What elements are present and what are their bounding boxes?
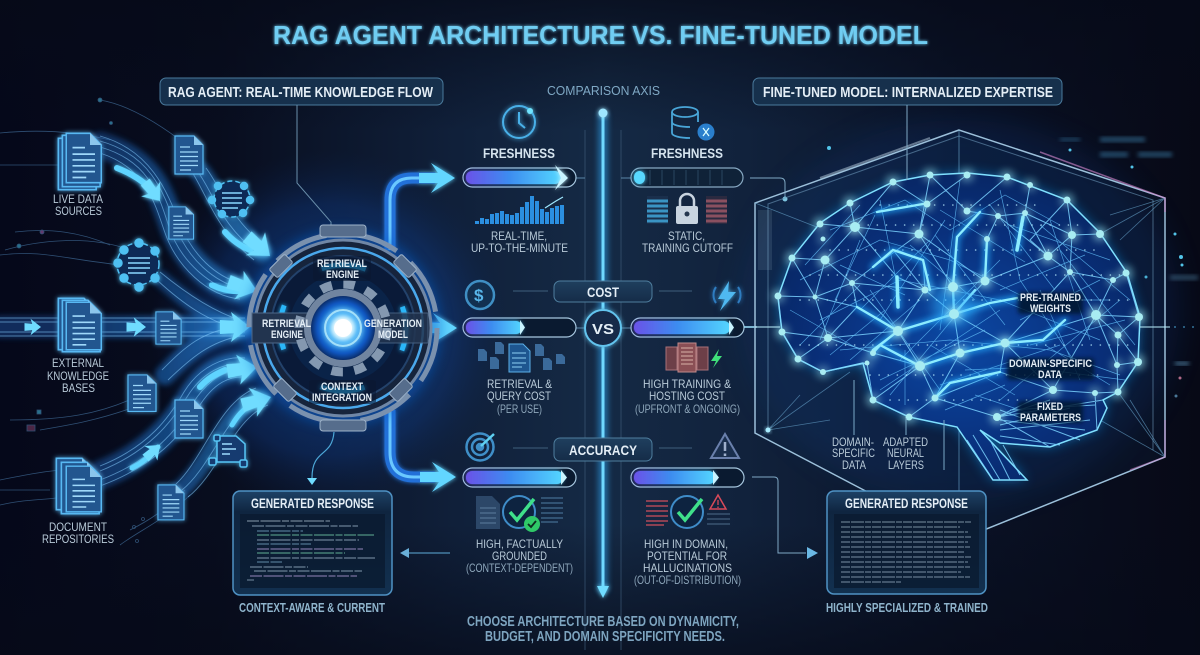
brain label: domain-specific data (below): DOMAIN- bbox=[832, 435, 874, 449]
gear label: context integration bbox=[309, 380, 376, 404]
arrow: to accuracy bbox=[390, 410, 456, 492]
fine-tuned: cost: HOSTING COST bbox=[649, 389, 726, 403]
meter: high with limit bbox=[631, 468, 744, 487]
brain label: domain-specific data (below): DATA bbox=[842, 458, 866, 472]
panel: fine-tuned model internalized expertise bbox=[744, 78, 1200, 615]
gear label: context integration: INTEGRATION bbox=[312, 392, 372, 404]
meter: per use, medium bbox=[463, 318, 576, 337]
fine-tuned: freshness bbox=[631, 107, 743, 255]
section heading: RAG agent bbox=[160, 78, 443, 105]
pill: accuracy: ACCURACY bbox=[569, 442, 638, 458]
brain label: adapted neural layers: LAYERS bbox=[888, 458, 924, 472]
source: live data sources bbox=[53, 133, 103, 218]
RAG: freshness: UP-TO-THE-MINUTE bbox=[471, 241, 568, 255]
fine-tuned: accuracy: HALLUCINATIONS bbox=[643, 561, 732, 575]
pill: cost bbox=[554, 281, 652, 302]
gear label: retrieval engine left: RETRIEVAL bbox=[262, 318, 311, 330]
gear label: context integration: CONTEXT bbox=[321, 381, 363, 393]
source: document repositories: DOCUMENT bbox=[49, 520, 108, 534]
leader lines: external labels to brain bbox=[854, 380, 944, 470]
central axis arrow bbox=[597, 108, 609, 598]
brain label: domain-specific data (below): SPECIFIC bbox=[832, 446, 875, 460]
card: RAG generated response: GENERATED RESPONSE bbox=[251, 495, 374, 511]
neural network brain bbox=[755, 172, 1170, 480]
fine-tuned: cost: (UPFRONT & ONGOING) bbox=[635, 402, 740, 416]
icon: document stack bbox=[56, 458, 101, 514]
gear label: retrieval engine top: RETRIEVAL bbox=[317, 258, 367, 270]
card: fine-tuned generated response: HIGHLY SPECIALIZED & TRAINED bbox=[826, 600, 988, 615]
brain label: domain-specific data: DATA bbox=[1038, 369, 1062, 381]
icon: database with badge bbox=[672, 107, 714, 140]
arrow: to freshness bbox=[390, 163, 455, 250]
source: external knowledge bases: BASES bbox=[62, 381, 95, 395]
arrow: accuracy back to response bbox=[400, 548, 450, 558]
icon: clock bbox=[503, 106, 535, 138]
brain label: adapted neural layers: ADAPTED bbox=[883, 435, 928, 449]
source: external knowledge bases bbox=[47, 298, 109, 395]
fine-tuned: freshness: TRAINING CUTOFF bbox=[642, 241, 733, 255]
glass prism enclosure bbox=[755, 130, 1165, 540]
fine-tuned: accuracy: POTENTIAL FOR bbox=[647, 549, 727, 563]
fine-tuned: cost bbox=[631, 281, 744, 416]
gear label: generation model bbox=[364, 318, 422, 341]
source: document repositories bbox=[42, 458, 114, 546]
brain label: pre-trained weights: PRE-TRAINED bbox=[1020, 292, 1081, 304]
RAG: accuracy: HIGH, FACTUALLY bbox=[476, 537, 563, 551]
gear label: retrieval engine left bbox=[262, 318, 311, 341]
connector lines from meters to the brain bbox=[744, 178, 818, 559]
meter: high cost bbox=[631, 318, 744, 337]
section heading: fine-tuned model bbox=[753, 78, 1062, 105]
closing recommendation: CHOOSE ARCHITECTURE BASED ON DYNAMICITY, bbox=[467, 614, 739, 630]
arrow: to cost bbox=[415, 313, 457, 343]
fine-tuned: accuracy bbox=[631, 434, 744, 587]
RAG: accuracy: (CONTEXT-DEPENDENT) bbox=[466, 561, 573, 575]
icon: document stack bbox=[58, 298, 101, 352]
icon: network node cluster (middle) bbox=[114, 239, 159, 291]
leader line: heading to gear bbox=[297, 105, 331, 226]
RAG: accuracy bbox=[463, 434, 576, 575]
icon: energy bolt bbox=[713, 281, 741, 311]
RAG: freshness: FRESHNESS bbox=[483, 145, 555, 161]
icon: warning triangle bbox=[711, 434, 739, 458]
section heading: RAG agent: RAG AGENT: REAL-TIME KNOWLEDGE FLOW bbox=[168, 84, 434, 101]
icon: network node cluster (upper) bbox=[208, 181, 254, 218]
icon: query documents bbox=[478, 342, 565, 372]
leader: heading to brain bbox=[906, 105, 908, 180]
decorative data specks bbox=[827, 137, 1200, 398]
source: document repositories: REPOSITORIES bbox=[42, 532, 114, 546]
panel: comparison axis bbox=[463, 83, 744, 650]
RAG: cost: RETRIEVAL & bbox=[487, 377, 552, 391]
fine-tuned: accuracy: HIGH IN DOMAIN, bbox=[644, 537, 728, 551]
fine-tuned: freshness: FRESHNESS bbox=[651, 145, 723, 161]
fine-tuned: freshness: STATIC, bbox=[668, 229, 705, 243]
brain label: adapted neural layers: NEURAL bbox=[887, 446, 924, 460]
card: fine-tuned generated response bbox=[826, 491, 988, 615]
brain label: domain-specific data (below) bbox=[832, 435, 875, 472]
icon: document stack bbox=[58, 133, 101, 190]
brain label: domain-specific data: DOMAIN-SPECIFIC bbox=[1009, 358, 1092, 370]
fine-tuned: cost: HIGH TRAINING & bbox=[643, 377, 731, 391]
axis label: COMPARISON AXIS bbox=[547, 83, 660, 98]
panel: RAG agent real-time knowledge flow bbox=[0, 78, 457, 615]
meter: high accuracy bbox=[463, 468, 576, 487]
card: RAG generated response bbox=[233, 491, 392, 615]
RAG: cost bbox=[463, 281, 576, 416]
RAG: accuracy: GROUNDED bbox=[492, 549, 547, 563]
gear label: retrieval engine top bbox=[313, 256, 371, 281]
arrow: gear to generated response bbox=[307, 432, 334, 485]
gear label: generation model: MODEL bbox=[378, 329, 408, 341]
brain label: fixed parameters: PARAMETERS bbox=[1020, 412, 1081, 424]
badge: vs bbox=[585, 310, 621, 346]
brain label: pre-trained weights bbox=[1018, 292, 1083, 315]
closing recommendation: BUDGET, AND DOMAIN SPECIFICITY NEEDS. bbox=[485, 629, 725, 645]
fine-tuned: accuracy: (OUT-OF-DISTRIBUTION) bbox=[634, 573, 741, 587]
card: RAG generated response: CONTEXT-AWARE & CURRENT bbox=[239, 600, 385, 615]
brain label: pre-trained weights: WEIGHTS bbox=[1030, 303, 1071, 315]
icon: certified document cluster bbox=[209, 435, 247, 467]
faint data streaks bbox=[0, 98, 190, 545]
title: RAG AGENT ARCHITECTURE VS. FINE-TUNED MODEL bbox=[273, 20, 928, 50]
icon: grounded check bbox=[476, 496, 563, 532]
pill: cost: COST bbox=[587, 284, 619, 300]
pill: accuracy bbox=[554, 438, 652, 461]
mini bar chart bbox=[475, 196, 564, 224]
gear label: retrieval engine left: ENGINE bbox=[271, 329, 303, 341]
brain label: fixed parameters: FIXED bbox=[1037, 401, 1063, 413]
meter: static, low bbox=[631, 168, 743, 187]
icon: locked training data bbox=[647, 194, 727, 224]
RAG: cost: (PER USE) bbox=[497, 402, 542, 416]
icon: target bbox=[466, 434, 494, 460]
brain label: fixed parameters bbox=[1018, 401, 1083, 424]
source: external knowledge bases: EXTERNAL bbox=[52, 356, 104, 370]
gear label: retrieval engine top: ENGINE bbox=[326, 269, 359, 281]
closing recommendation bbox=[467, 614, 739, 645]
data flow ribbons into the gear bbox=[0, 136, 280, 497]
icons: documents in transit bbox=[128, 136, 203, 520]
source: external knowledge bases: KNOWLEDGE bbox=[47, 369, 109, 383]
source: live data sources: SOURCES bbox=[55, 204, 102, 218]
RAG: freshness bbox=[463, 106, 576, 255]
RAG: freshness: REAL-TIME, bbox=[491, 229, 547, 243]
icon: dollar: $ bbox=[474, 286, 484, 305]
gear label: generation model: GENERATION bbox=[364, 318, 422, 330]
icon: servers bbox=[666, 343, 722, 372]
brain label: domain-specific data bbox=[1007, 358, 1094, 381]
icon: check and hallucination warning bbox=[646, 495, 730, 528]
section heading: fine-tuned model: FINE-TUNED MODEL: INTERNALIZED EXPERTISE bbox=[763, 84, 1053, 101]
brain label: adapted neural layers bbox=[883, 435, 928, 472]
source: live data sources: LIVE DATA bbox=[53, 192, 103, 206]
output arrows from the gear bbox=[390, 163, 457, 492]
card: fine-tuned generated response: GENERATED RESPONSE bbox=[845, 495, 968, 511]
gear: RAG processing engine bbox=[245, 225, 441, 431]
badge: vs: VS bbox=[592, 321, 614, 338]
meter: real-time, full bbox=[463, 165, 576, 190]
RAG: cost: QUERY COST bbox=[487, 389, 552, 403]
